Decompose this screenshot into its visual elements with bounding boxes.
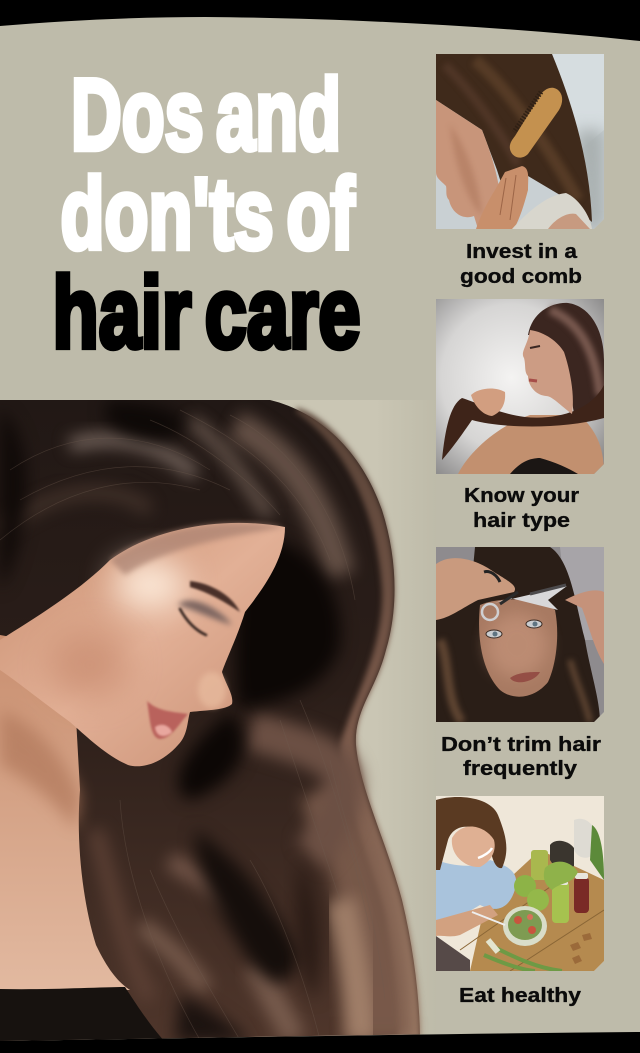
- hair dome: [528, 303, 604, 420]
- apples and greens: [514, 875, 536, 897]
- face: [436, 100, 500, 229]
- photo: invest in a good comb: [436, 54, 604, 229]
- skin: neck and chest: [0, 635, 130, 990]
- white top: [512, 193, 592, 229]
- wooden brush: [510, 88, 562, 158]
- lips: [147, 701, 188, 739]
- nuts: [570, 933, 592, 964]
- hair mass: [0, 400, 420, 1042]
- label: invest in a good comb: good comb: [460, 265, 582, 288]
- right hand: [565, 590, 604, 664]
- label: invest in a good comb: [460, 240, 582, 288]
- label: know your hair type: [464, 484, 579, 532]
- shirt: [436, 860, 516, 925]
- hair: [436, 797, 506, 870]
- dark hair: [436, 547, 600, 722]
- spring onions: [484, 945, 562, 971]
- face: [0, 523, 285, 766]
- label: don't trim hair frequently: [441, 733, 601, 780]
- black top: [0, 987, 165, 1042]
- shoulders: [458, 415, 604, 474]
- title: Dos and: [71, 60, 341, 172]
- label: know your hair type: Know your: [464, 484, 579, 507]
- label: don't trim hair frequently: frequently: [463, 757, 578, 780]
- hand: [476, 166, 528, 229]
- title: hair care: [52, 258, 360, 370]
- title: don'ts of: [60, 158, 355, 270]
- dark hair shadows: [0, 400, 340, 1042]
- label: invest in a good comb: Invest in a: [466, 240, 578, 263]
- left hand: [436, 558, 515, 620]
- photo: don't trim hair frequently: [436, 547, 604, 722]
- face: [479, 599, 557, 697]
- long hair: [436, 54, 592, 222]
- bottles and jars: [531, 850, 548, 880]
- hair highlights: [0, 420, 362, 1042]
- ponytail: [442, 385, 604, 460]
- face: [452, 826, 495, 867]
- salad bowl: [503, 906, 547, 946]
- scissors: [482, 572, 567, 620]
- face: [523, 330, 573, 414]
- photo: eat healthy: [436, 796, 604, 971]
- label: eat healthy: Eat healthy: [459, 984, 582, 1007]
- label: don't trim hair frequently: Don’t trim hair: [441, 733, 601, 756]
- photo: know your hair type: [436, 299, 604, 474]
- hair strands: [0, 410, 385, 1040]
- hand: [471, 388, 505, 416]
- label: know your hair type: hair type: [473, 509, 570, 532]
- eye and brow: [178, 581, 240, 635]
- main photo: woman with long brown hair: [0, 400, 420, 1042]
- table: [470, 850, 604, 971]
- title: [52, 60, 360, 370]
